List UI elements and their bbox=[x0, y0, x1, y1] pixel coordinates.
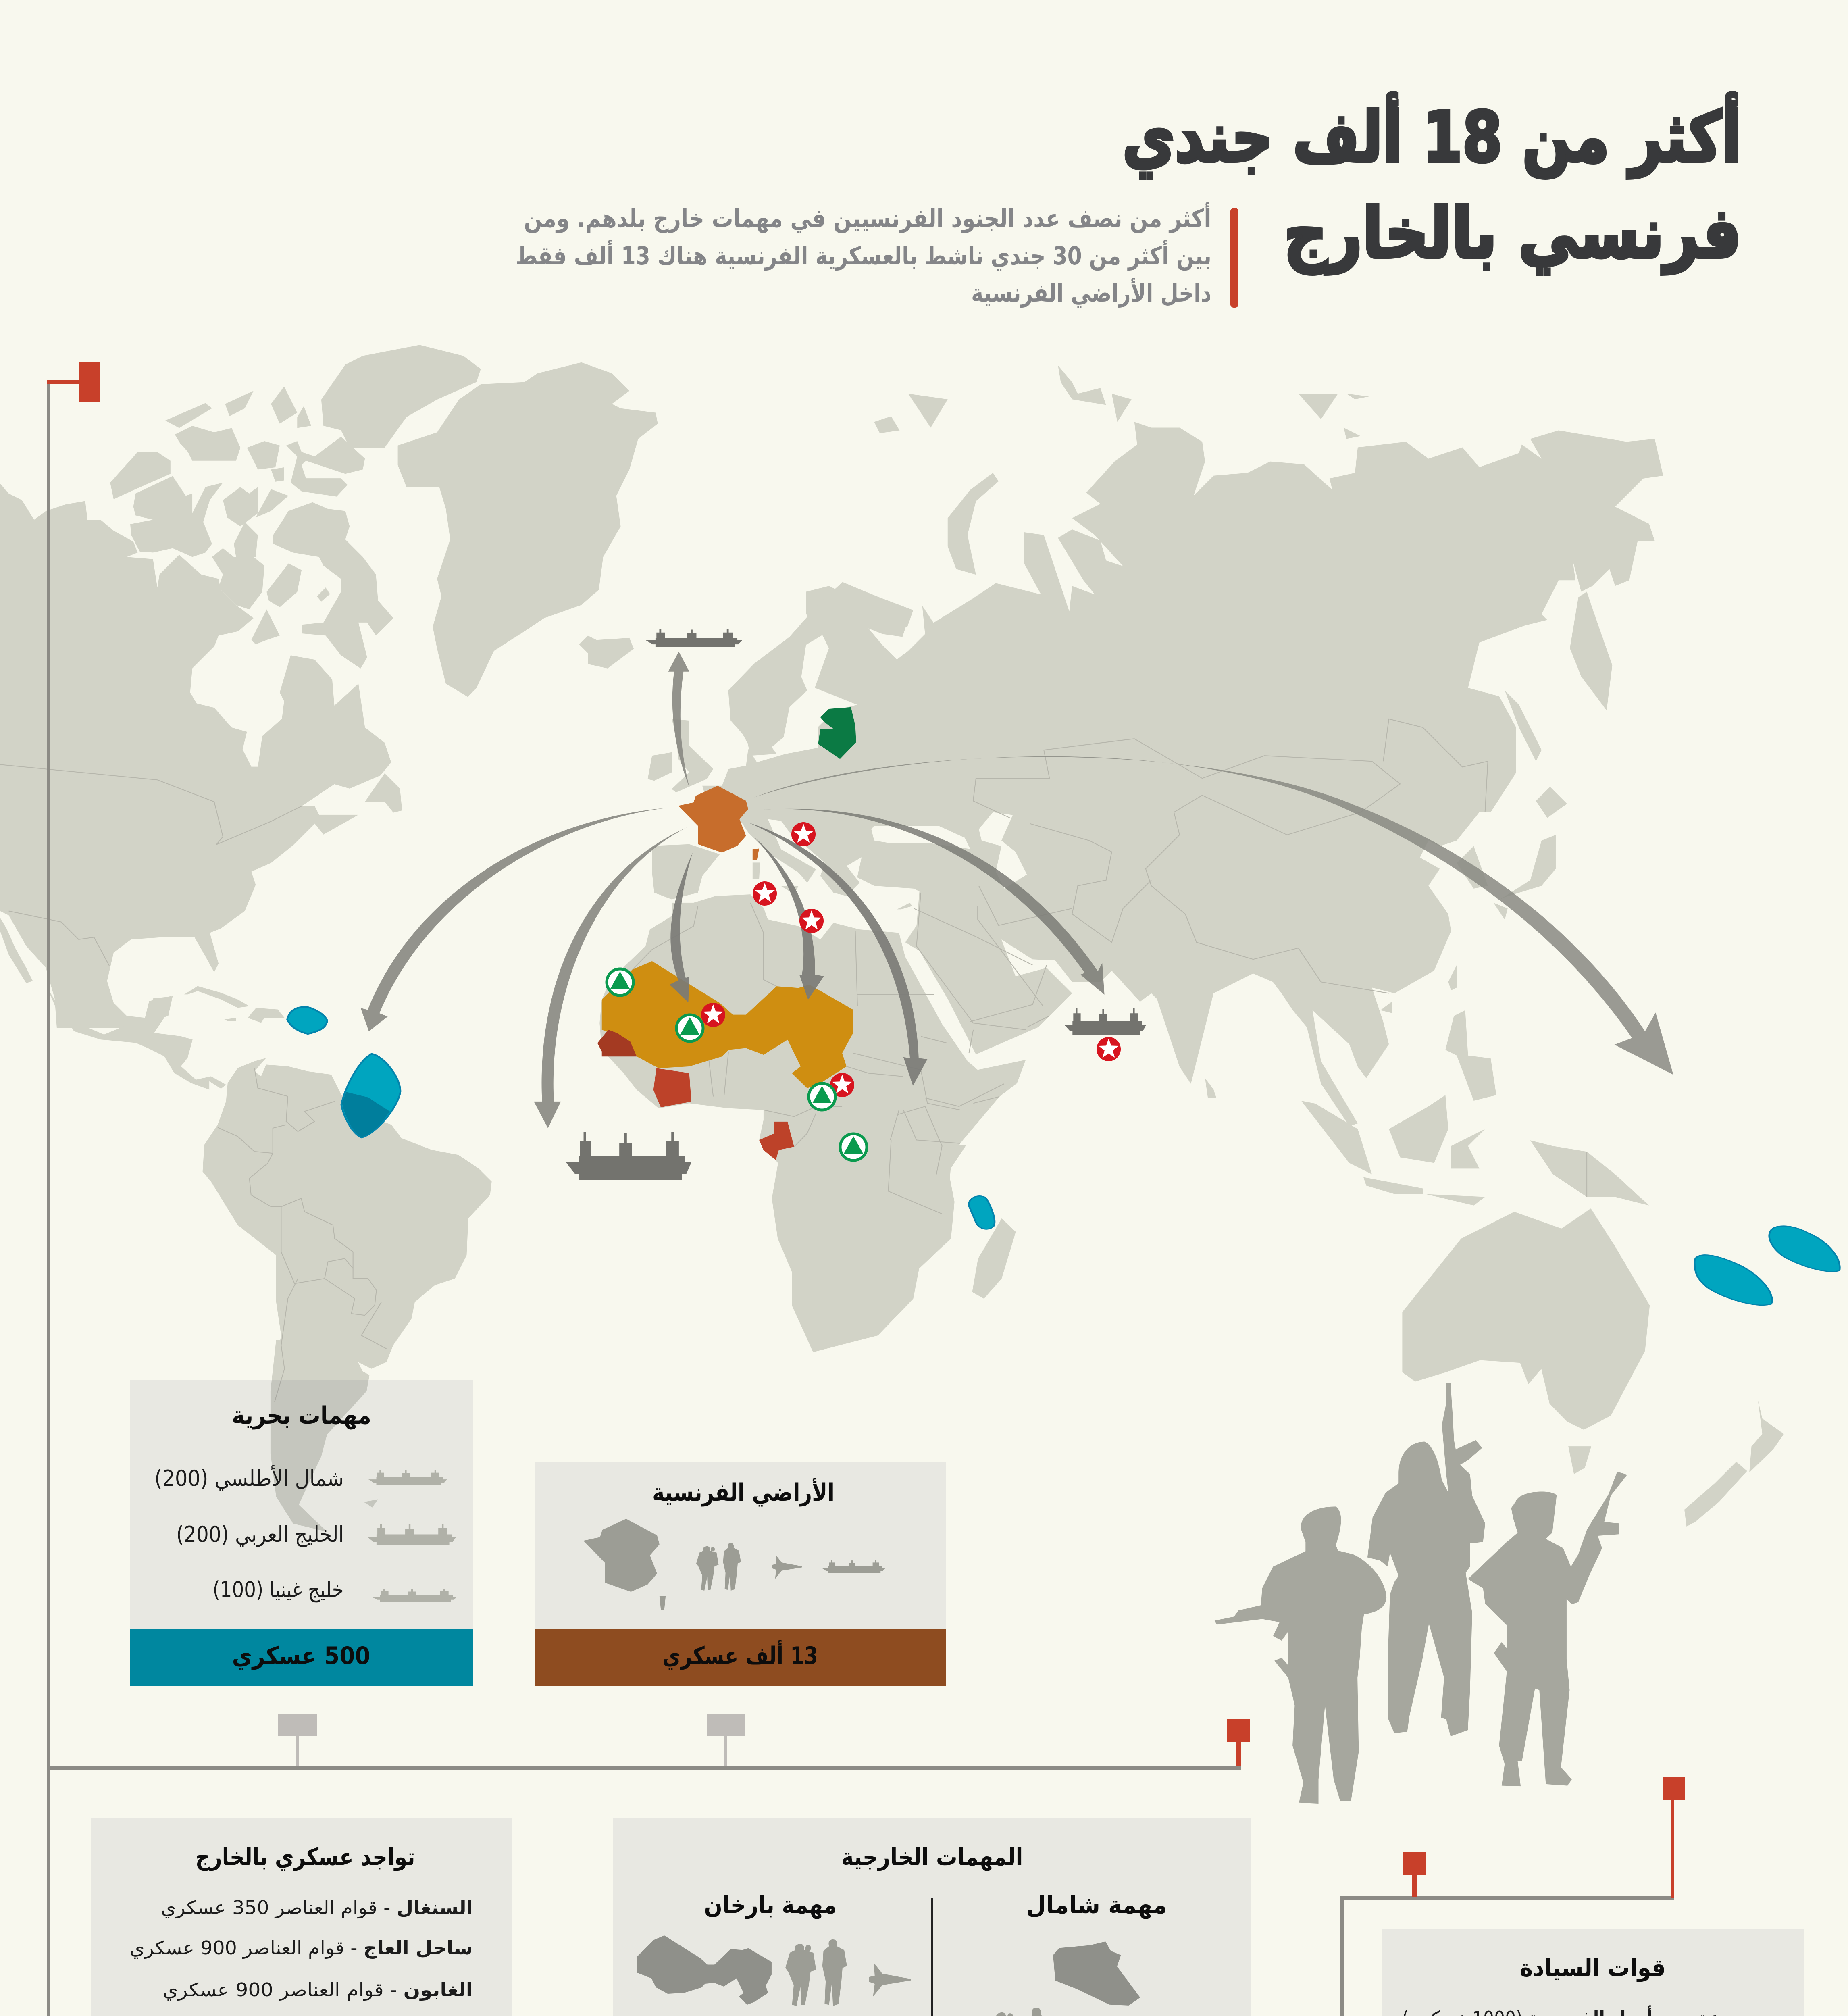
subtitle text: داخل الأراضي الفرنسية bbox=[971, 278, 1211, 308]
icons: Chammal forces bbox=[986, 2008, 1221, 2016]
list: naval deployments bbox=[154, 1465, 344, 1603]
title: فرنسي بالخارج bbox=[1284, 193, 1742, 274]
Gabon bbox=[759, 1122, 794, 1160]
red start tick bbox=[47, 362, 100, 402]
arrow: Pacific bbox=[754, 756, 1673, 1075]
arrow: east Sahel bbox=[755, 837, 824, 1000]
Senegal bbox=[597, 1030, 637, 1056]
Baltic states bbox=[818, 707, 856, 759]
arrows from France bbox=[360, 652, 1673, 1128]
list: naval deployments: الخليج العربي (200) bbox=[176, 1522, 344, 1547]
New Caledonia zone bbox=[1694, 1255, 1772, 1305]
map: North America and Arctic bbox=[0, 345, 658, 1028]
list: bases: الغابون - قوام العناصر 900 عسكري bbox=[163, 1979, 472, 2001]
panel: foreign missions bbox=[613, 1818, 1251, 2016]
title bbox=[1122, 92, 1742, 274]
French Guiana zone bbox=[341, 1054, 400, 1137]
icon: Sahel map bbox=[637, 1935, 772, 2005]
ship: north Atlantic bbox=[646, 629, 742, 647]
heading: Chammal: مهمة شامال bbox=[1026, 1891, 1167, 1919]
ship: Arabian Gulf bbox=[1064, 1008, 1146, 1035]
map: Central and South America bbox=[47, 986, 492, 1492]
Antilles zone bbox=[287, 1007, 327, 1034]
French Polynesia zone bbox=[1769, 1226, 1840, 1272]
heading: sovereignty forces: قوات السيادة bbox=[1520, 1954, 1666, 1982]
arrow: Americas bbox=[360, 808, 666, 1031]
grey ticks bbox=[229, 1714, 1613, 2016]
overseas territories bbox=[287, 1007, 1840, 1305]
map: country borders bbox=[0, 719, 1587, 1402]
icons: ships bbox=[368, 1470, 457, 1602]
right trunk line bbox=[248, 1896, 1674, 2016]
map: Scandinavia and Madagascar and Australia bbox=[728, 582, 1650, 1430]
heading: Barkhane: مهمة بارخان bbox=[704, 1891, 837, 1919]
panel: French territory bbox=[535, 1462, 946, 1686]
total bar: 13 thousand bbox=[535, 1629, 946, 1686]
red tick: middle bbox=[1403, 1852, 1426, 1897]
world map bbox=[0, 345, 1840, 1532]
list: bases: ساحل العاج - قوام العناصر 900 عسكري bbox=[130, 1937, 472, 1959]
total bar: 500 bbox=[130, 1629, 473, 1686]
subtitle text: أكثر من نصف عدد الجنود الفرنسيين في مهمات خارج بلدهم. ومن bbox=[524, 202, 1211, 233]
map: Europe and Africa bbox=[599, 719, 1026, 1210]
panel: military presence abroad bbox=[91, 1818, 512, 2016]
icons: Barkhane forces bbox=[785, 1939, 911, 2006]
panel: naval missions bbox=[130, 1380, 473, 1686]
ship: Gulf of Guinea bbox=[566, 1132, 691, 1180]
arrow: north Atlantic bbox=[668, 652, 689, 787]
Sahel countries bbox=[602, 961, 853, 1088]
heading: foreign missions: المهمات الخارجية bbox=[841, 1843, 1023, 1871]
heading: presence abroad: تواجد عسكري بالخارج bbox=[195, 1843, 415, 1871]
subtitle text bbox=[516, 202, 1211, 308]
title: أكثر من 18 ألف جندي bbox=[1122, 92, 1742, 178]
red tick: upper bbox=[1227, 1719, 1250, 1766]
heading: naval missions: مهمات بحرية bbox=[232, 1402, 371, 1430]
highlighted countries bbox=[597, 707, 856, 1160]
left trunk line bbox=[47, 381, 50, 2016]
icons: forces bbox=[696, 1543, 885, 1591]
markers: EU missions bbox=[701, 822, 1121, 1097]
upper horizontal line bbox=[47, 1766, 1241, 1770]
soldiers silhouette bbox=[1215, 1383, 1627, 1804]
list: bases: السنغال - قوام العناصر 350 عسكري bbox=[161, 1897, 473, 1919]
list: naval deployments: شمال الأطلسي (200) bbox=[154, 1465, 344, 1491]
French Guiana land overlap bbox=[342, 1092, 390, 1137]
ships on map bbox=[566, 629, 1146, 1180]
total bar: 500: 500 عسكري bbox=[232, 1642, 370, 1670]
list: naval deployments: خليج غينيا (100) bbox=[213, 1577, 343, 1603]
icon: Iraq and Syria map bbox=[1053, 1941, 1140, 2006]
connector lines bbox=[47, 362, 1848, 2016]
map: Patagonia bbox=[271, 1340, 389, 1532]
panel: sovereignty forces bbox=[1382, 1929, 1804, 2016]
arrow: Gulf of Guinea bbox=[534, 827, 687, 1128]
arrow: Horn of Africa bbox=[748, 823, 927, 1086]
arrow: Arabian Gulf bbox=[759, 809, 1105, 995]
heading: French territory: الأراضي الفرنسية bbox=[652, 1478, 835, 1507]
Mayotte zone bbox=[969, 1196, 995, 1229]
subtitle text: بين أكثر من 30 جندي ناشط بالعسكرية الفرنسية هناك 13 ألف فقط bbox=[516, 240, 1211, 271]
list: bases bbox=[130, 1897, 473, 2016]
icon: France map bbox=[583, 1519, 666, 1610]
subtitle accent bar bbox=[1230, 208, 1238, 308]
red tick: right bbox=[1663, 1777, 1685, 1898]
map: Eurasia bbox=[806, 365, 1663, 1206]
Ivory Coast bbox=[653, 1068, 691, 1107]
arrow: west Sahel bbox=[670, 852, 693, 1002]
map: Tasmania and New Zealand bbox=[1568, 1400, 1784, 1527]
markers: UN missions bbox=[607, 969, 867, 1160]
France bbox=[678, 786, 759, 860]
total bar: 13 thousand: 13 ألف عسكري bbox=[662, 1640, 818, 1670]
